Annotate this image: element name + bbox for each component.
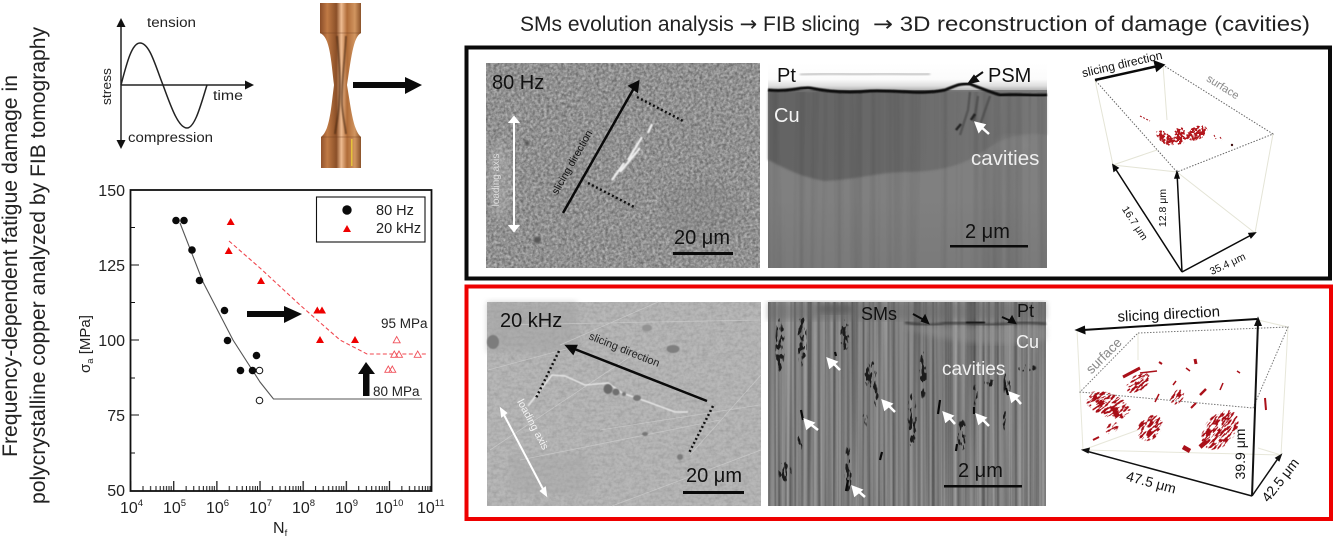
- stress-time diagram: tension: [147, 15, 196, 30]
- panel: 20 kHz: [466, 286, 1331, 519]
- axis titles: [77, 315, 288, 537]
- y axis labels: 75: [107, 408, 125, 425]
- micrograph: 80 Hz cross-section: [768, 63, 1047, 268]
- y axis labels: 125: [98, 258, 125, 275]
- cavities: [1153, 122, 1210, 149]
- heading: workflow: → 3D reconstruction of damage (cavities): [873, 12, 1310, 36]
- label: 39.9 um: 39.9 μm: [1232, 429, 1248, 479]
- scale bar: 20 μm: [686, 465, 742, 487]
- dotted slice limits: [536, 351, 713, 453]
- slicing direction arrow: [563, 82, 638, 213]
- x axis labels: 11: [435, 498, 445, 509]
- dimension arrows: [1083, 319, 1281, 496]
- 80 Hz points: [172, 217, 260, 374]
- heading: workflow: SMs evolution analysis → FIB slicing: [520, 12, 860, 36]
- x axis labels: 10: [206, 500, 224, 517]
- cavities: [774, 310, 1039, 498]
- label: Pt: Pt: [777, 65, 796, 87]
- black arrows: SMs: [913, 314, 1015, 323]
- axis titles: a: [85, 358, 96, 364]
- label: 95 MPa: 95 MPa: [381, 316, 428, 331]
- micrograph: 80 Hz surface: [486, 63, 760, 268]
- x axis labels: 7: [267, 498, 272, 509]
- scale bar: [683, 465, 744, 494]
- legend: 80 Hz: [376, 203, 414, 219]
- micrograph: 20 kHz surface: [487, 302, 761, 506]
- run-out 80 Hz points: [256, 367, 263, 404]
- label: surface: surface: [1083, 335, 1125, 377]
- x axis labels: 9: [353, 498, 358, 509]
- stray cavities: [1140, 116, 1222, 140]
- y axis labels: 150: [98, 183, 125, 200]
- 20 kHz fit line: [229, 241, 426, 354]
- label: slicing direction: slicing direction: [1117, 303, 1220, 326]
- x axis labels: 10: [163, 500, 181, 517]
- surface scratches: [488, 302, 761, 506]
- run-out 20 kHz points: [385, 336, 421, 372]
- stress-time diagram: time: [213, 88, 243, 103]
- scale bar: 2 μm: [958, 460, 1003, 482]
- scale bar: [950, 221, 1028, 248]
- x axis labels: 8: [310, 498, 315, 509]
- dimension arrows: [1113, 165, 1255, 272]
- arrow: specimen to micrographs: [353, 77, 422, 94]
- micrograph: 20 kHz cross-section: [768, 301, 1046, 506]
- arrow: fatigue limit increase: [358, 362, 375, 396]
- cavity streaks: [1093, 359, 1266, 451]
- scale bar: [944, 460, 1022, 488]
- arrow: PSM: [969, 72, 983, 83]
- label: slicing direction: slicing direction: [1081, 48, 1164, 80]
- slicing direction arrow: [1095, 62, 1163, 80]
- x axis labels: 5: [181, 498, 186, 509]
- label: 80 Hz: 80 Hz: [492, 72, 544, 94]
- 20 kHz points: [225, 218, 359, 343]
- 3D reconstruction: 20 kHz: [1072, 303, 1302, 505]
- label: 35.4 um: 35.4 μm: [1208, 251, 1248, 278]
- PSM damage: [956, 92, 990, 135]
- heading: workflow: [520, 12, 1310, 36]
- label: slicing direction: slicing direction: [549, 128, 595, 197]
- white arrows: cavities: [805, 359, 1021, 497]
- label: loading axis: loading axis: [514, 397, 551, 452]
- y axis labels: 50: [107, 483, 125, 500]
- x axis labels: [120, 498, 445, 517]
- x axis labels: 4: [138, 498, 143, 509]
- label: slicing direction: slicing direction: [587, 331, 661, 370]
- x axis labels: 10: [375, 500, 393, 517]
- label: SMs: SMs: [861, 304, 897, 324]
- x axis labels: 6: [224, 498, 229, 509]
- label: 47.5 um: 47.5 μm: [1125, 468, 1178, 496]
- 3D reconstruction: 80 Hz: [1081, 48, 1273, 278]
- axis titles: σ: [77, 364, 94, 373]
- panel: 80 Hz: [466, 48, 1330, 278]
- x axis labels: 10: [249, 500, 267, 517]
- arrow: shift to longer life: [247, 306, 302, 323]
- label: loading axis: loading axis: [491, 154, 502, 206]
- title: [0, 27, 50, 504]
- x axis labels: 10: [417, 500, 435, 517]
- label: cavities: cavities: [942, 359, 1005, 380]
- slip marks: [612, 124, 652, 180]
- label: 42.5 um: 42.5 μm: [1258, 455, 1302, 505]
- 80 Hz fit line: [180, 223, 422, 399]
- x axis labels: 10: [335, 500, 353, 517]
- stress-time diagram: compression: [128, 130, 213, 145]
- loading axis arrow: [501, 409, 546, 495]
- stress-time diagram: stress: [100, 68, 114, 105]
- label: PSM: PSM: [988, 65, 1031, 87]
- top damage band: [768, 302, 1046, 325]
- label: Pt: Pt: [1017, 301, 1034, 321]
- label: 80 MPa: 80 MPa: [373, 384, 420, 399]
- label: Cu: Cu: [1016, 332, 1039, 352]
- cavity clusters: [1072, 367, 1248, 459]
- label: surface: surface: [1204, 73, 1241, 102]
- slicing direction arrow: [1077, 319, 1257, 333]
- x axis labels: 10: [393, 498, 403, 509]
- crack with damage: [487, 324, 688, 460]
- arrow: cavities: [976, 123, 989, 134]
- plot frame and axes: [130, 190, 432, 491]
- label: 12.8 um: 12.8 μm: [1157, 189, 1169, 227]
- copper specimen: [320, 3, 361, 168]
- legend: [316, 197, 425, 242]
- dotted slice limits: [588, 97, 683, 208]
- label: 20 kHz: 20 kHz: [500, 310, 562, 332]
- label: cavities: cavities: [971, 147, 1039, 170]
- x axis labels: 10: [120, 500, 138, 517]
- legend: 20 kHz: [376, 221, 421, 237]
- loading axis arrow: [510, 117, 518, 231]
- label: 16.7 um: 16.7 μm: [1119, 204, 1150, 243]
- y axis labels: [98, 183, 125, 500]
- label: Cu: Cu: [774, 105, 800, 127]
- scale bar: 2 μm: [965, 221, 1010, 243]
- title: polycrystalline copper analyzed by FIB tomography: [26, 27, 50, 504]
- axis titles: [MPa]: [77, 315, 94, 358]
- slicing direction arrow: [567, 346, 707, 401]
- S-N chart: [77, 183, 445, 537]
- y axis labels: 100: [98, 333, 125, 350]
- axis titles: N: [273, 520, 285, 537]
- x axis labels: 10: [292, 500, 310, 517]
- scale bar: 20 μm: [674, 227, 730, 249]
- stress-time diagram: [100, 15, 254, 149]
